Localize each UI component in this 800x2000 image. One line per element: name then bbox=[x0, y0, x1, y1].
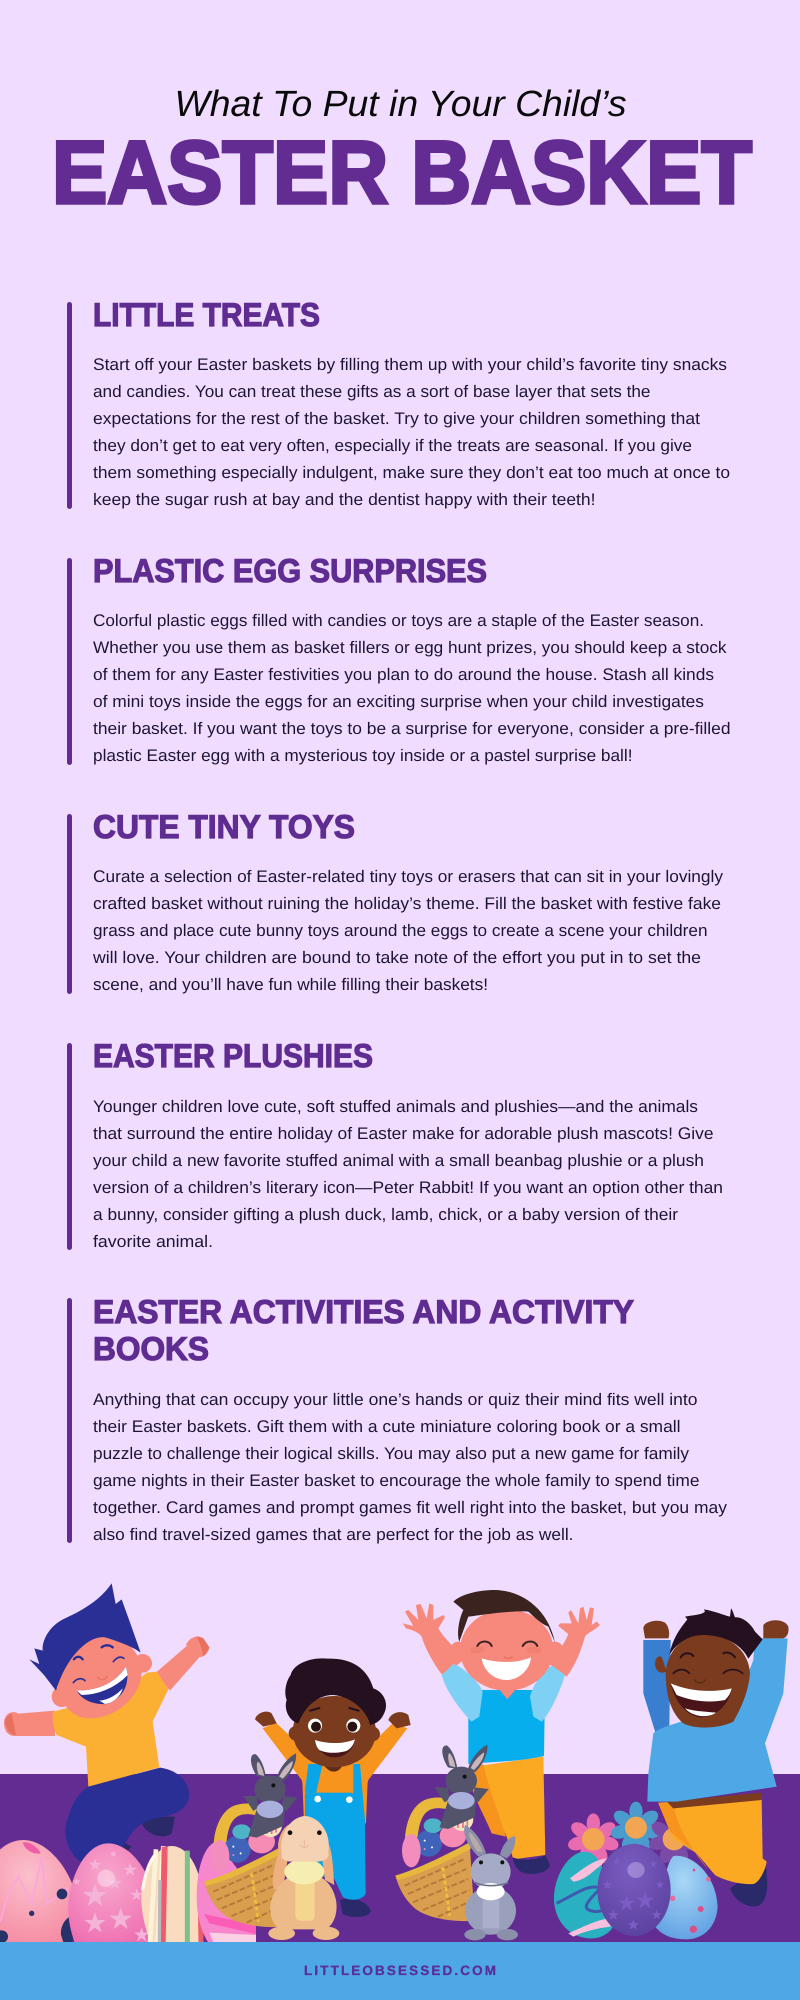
illustration: children with easter eggs and rabbits bbox=[0, 1583, 789, 1943]
text block: keep the sugar rush at bay and the dentist happy with their teeth! bbox=[93, 490, 596, 509]
egg pink stars bbox=[68, 1843, 156, 1943]
text block bbox=[93, 1390, 728, 1544]
accent bar bbox=[67, 302, 72, 509]
text block: their basket. If you want the toys to be a surprise for everyone, consider a pre-filled bbox=[93, 719, 730, 738]
footer bar bbox=[0, 1942, 800, 2000]
text block: Younger children love cute, soft stuffed animals and plushies—and the animals bbox=[93, 1097, 698, 1116]
text block: of mini toys inside the eggs for an exciting surprise when your child investigates bbox=[93, 692, 704, 711]
subtitle: What To Put in Your Child’s bbox=[174, 83, 626, 124]
heading bbox=[93, 1293, 634, 1367]
text block bbox=[92, 867, 724, 994]
text block bbox=[93, 1097, 723, 1251]
main heading: EASTER BASKET bbox=[52, 122, 752, 222]
boy 4 jumping bbox=[643, 1608, 789, 1906]
heading: EASTER PLUSHIES bbox=[93, 1037, 373, 1074]
accent bar bbox=[67, 1298, 72, 1543]
heading: BOOKS bbox=[93, 1330, 209, 1367]
egg pink swirl bbox=[0, 1840, 78, 1943]
text block: expectations for the rest of the basket. Try to give your children something that bbox=[93, 409, 700, 428]
basket with eggs and toy rabbit right bbox=[395, 1745, 489, 1921]
text block bbox=[93, 355, 730, 509]
text block: puzzle to challenge their logical skills. You may also put a new game for family bbox=[93, 1444, 690, 1463]
easter eggs left bbox=[0, 1840, 256, 1943]
basket with eggs and toy rabbit left bbox=[204, 1753, 297, 1927]
text block: Colorful plastic eggs filled with candies or toys are a staple of the Easter season. bbox=[93, 611, 704, 630]
egg pink banded bbox=[197, 1842, 256, 1943]
text block: they don’t get to eat very often, especially if the treats are seasonal. If you give bbox=[93, 436, 692, 455]
text block: plastic Easter egg with a mysterious toy inside or a pastel surprise ball! bbox=[93, 746, 632, 765]
text block: grass and place cute bunny toys around the eggs to create a scene your children bbox=[93, 921, 708, 940]
text block: Anything that can occupy your little one’s hands or quiz their mind fits well into bbox=[93, 1390, 698, 1409]
accent bar bbox=[67, 558, 72, 765]
text block: scene, and you’ll have fun while filling their baskets! bbox=[93, 975, 488, 994]
heading: EASTER ACTIVITIES AND ACTIVITY bbox=[93, 1293, 634, 1330]
tan rabbit bbox=[268, 1816, 339, 1940]
text block: also find travel-sized games that are perfect for the job as well. bbox=[93, 1525, 574, 1544]
boy 2 with overalls bbox=[255, 1658, 411, 1917]
pink flower bbox=[566, 1813, 620, 1866]
teal swirl egg bbox=[554, 1852, 613, 1938]
text block: your child a new favorite stuffed animal with a small beanbag plushie or a plush bbox=[93, 1151, 704, 1170]
text block: Curate a selection of Easter-related tiny toys or erasers that can sit in your lovingly bbox=[93, 867, 724, 886]
text block: Start off your Easter baskets by filling them up with your child’s favorite tiny snacks bbox=[93, 355, 727, 374]
accent bar bbox=[67, 1043, 72, 1250]
text block: Whether you use them as basket fillers or egg hunt prizes, you should keep a stock bbox=[93, 638, 727, 657]
easter eggs and flowers right bbox=[554, 1802, 718, 1939]
text block: them something especially indulgent, make sure they don’t eat too much at once to bbox=[93, 463, 730, 482]
text block: of them for any Easter festivities you plan to do around the house. Stash all kinds bbox=[93, 665, 714, 684]
grey rabbit bbox=[464, 1825, 518, 1940]
purple floor band bbox=[0, 1774, 800, 1942]
text block: their Easter baskets. Gift them with a cute miniature coloring book or a small bbox=[93, 1417, 680, 1436]
accent bar bbox=[67, 814, 72, 994]
text block: a bunny, consider gifting a plush duck, lamb, chick, or a baby version of their bbox=[93, 1205, 678, 1224]
egg striped bbox=[141, 1846, 203, 1943]
blue flower bbox=[609, 1802, 663, 1854]
panel: easter activities and activity books bbox=[67, 1293, 728, 1544]
heading: LITTLE TREATS bbox=[93, 296, 320, 333]
text block: game nights in their Easter basket to encourage the whole family to spend time bbox=[93, 1471, 699, 1490]
boy 1 jumping bbox=[4, 1583, 209, 1862]
text block: and candies. You can treat these gifts as a sort of base layer that sets the bbox=[93, 382, 650, 401]
heading: PLASTIC EGG SURPRISES bbox=[93, 552, 487, 589]
title bbox=[52, 83, 752, 222]
purple flower bbox=[647, 1813, 701, 1865]
footer text: LITTLEOBSESSED.COM bbox=[304, 1963, 496, 1978]
text block: favorite animal. bbox=[93, 1232, 213, 1251]
purple star egg bbox=[597, 1844, 671, 1936]
text block: together. Card games and prompt games fit well right into the basket, but you may bbox=[93, 1498, 728, 1517]
blue speckled egg bbox=[655, 1856, 718, 1939]
text block: will love. Your children are bound to take note of the effort you put in to set the bbox=[92, 948, 701, 967]
text block: crafted basket without ruining the holiday’s theme. Fill the basket with festive fake bbox=[93, 894, 721, 913]
panel: easter plushies bbox=[67, 1037, 723, 1251]
panel: little treats bbox=[67, 296, 730, 509]
text block: version of a children’s literary icon—Peter Rabbit! If you want an option other than bbox=[93, 1178, 723, 1197]
text block bbox=[93, 611, 730, 765]
text block: that surround the entire holiday of Easter make for adorable plush mascots! Give bbox=[93, 1124, 714, 1143]
heading: CUTE TINY TOYS bbox=[93, 808, 355, 845]
panel: plastic egg surprises bbox=[67, 552, 730, 765]
panel: cute tiny toys bbox=[67, 808, 724, 994]
boy 3 arms raised bbox=[403, 1590, 600, 1874]
